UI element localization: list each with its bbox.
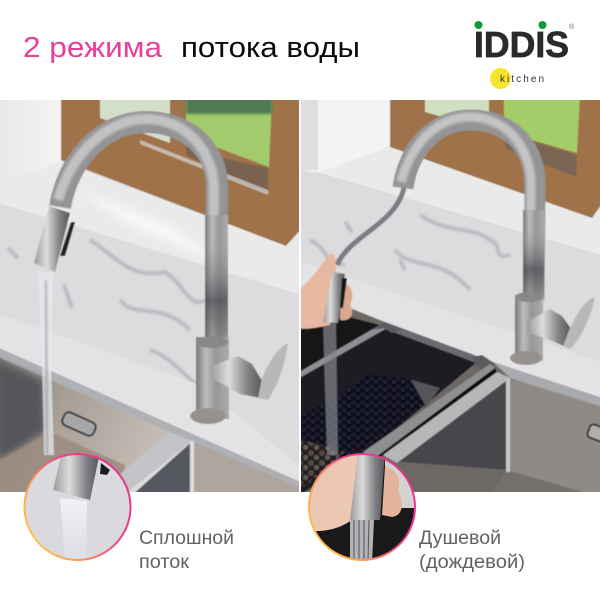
marble ledge top [318,147,600,257]
column shade [205,252,228,338]
marble counter [0,316,246,456]
head close-up [53,452,100,500]
colander rim [301,326,386,378]
basin shadow [0,360,46,458]
marble wall face [0,202,305,490]
fingers [382,466,402,517]
column shade [523,225,544,297]
right basin floor [376,461,507,497]
fingers [340,282,352,320]
left black sink [301,317,380,372]
chrome divider [120,432,192,490]
chrome bar [383,372,510,463]
colander front rim [363,364,495,461]
colander floor [410,379,440,408]
palm [305,452,360,531]
wall [0,95,62,186]
handle [210,343,288,400]
lower berries [296,438,345,492]
colander far rim [394,330,474,362]
chrome sink edge [0,346,305,497]
window glass [100,95,272,195]
circle inset: shower stream [305,452,420,562]
colander interior [296,328,477,497]
ring [309,454,415,560]
logo: IDDIS kitchen: kitchen [500,74,544,85]
colander clips [372,322,494,372]
overflow slot [586,423,600,445]
caption: shower stream: (дождевой) [419,552,525,573]
trigger [340,278,347,308]
head close-up [350,452,385,520]
pull-out head [34,206,70,272]
overflow slot [61,411,97,437]
water [350,520,374,562]
shower water [323,323,338,455]
spout [401,117,535,300]
marble veins [8,240,215,390]
wall [302,100,391,174]
water [60,498,87,560]
title: 2 режима [23,32,163,64]
title [23,32,360,64]
handle [527,297,595,349]
base [190,336,229,424]
ledge sunlight [106,203,196,249]
far basin floor [490,470,600,497]
background [385,455,420,508]
circle inset: solid stream [24,452,130,560]
stream shadow [45,280,48,455]
water stream [38,272,54,455]
panel: shower stream photo [296,95,600,497]
marble veins [310,215,510,290]
ring [24,454,130,560]
left basin [0,356,170,497]
black gap [374,368,497,459]
trigger [100,463,110,475]
spout [48,110,229,216]
marble counter [296,260,600,400]
panel: solid stream photo [0,95,305,497]
trigger [60,222,75,256]
right basin [144,442,299,492]
logo: IDDIS kitchen: IDDIS [474,24,569,65]
logo: IDDIS kitchen: ® [569,23,575,31]
marble wall face [296,169,600,366]
title: потока воды [181,32,360,64]
basin floor [0,434,126,492]
column [523,210,544,300]
hand [296,253,336,329]
caption: solid stream: Сплошной [139,528,234,549]
chrome counter edge [493,362,600,408]
blueberries [301,375,425,482]
hose [337,188,404,265]
base [510,292,543,365]
window frame [390,95,600,218]
column [205,215,228,340]
caption: solid stream: поток [139,552,190,573]
window frame [61,95,305,246]
window glass [425,95,580,177]
logo: IDDIS kitchen [474,21,575,89]
caption: shower stream: Душевой [419,528,501,549]
far basin wall [507,378,600,497]
right basin wall [397,378,510,470]
marble ledge top [0,162,305,296]
pull-out head [323,272,345,323]
